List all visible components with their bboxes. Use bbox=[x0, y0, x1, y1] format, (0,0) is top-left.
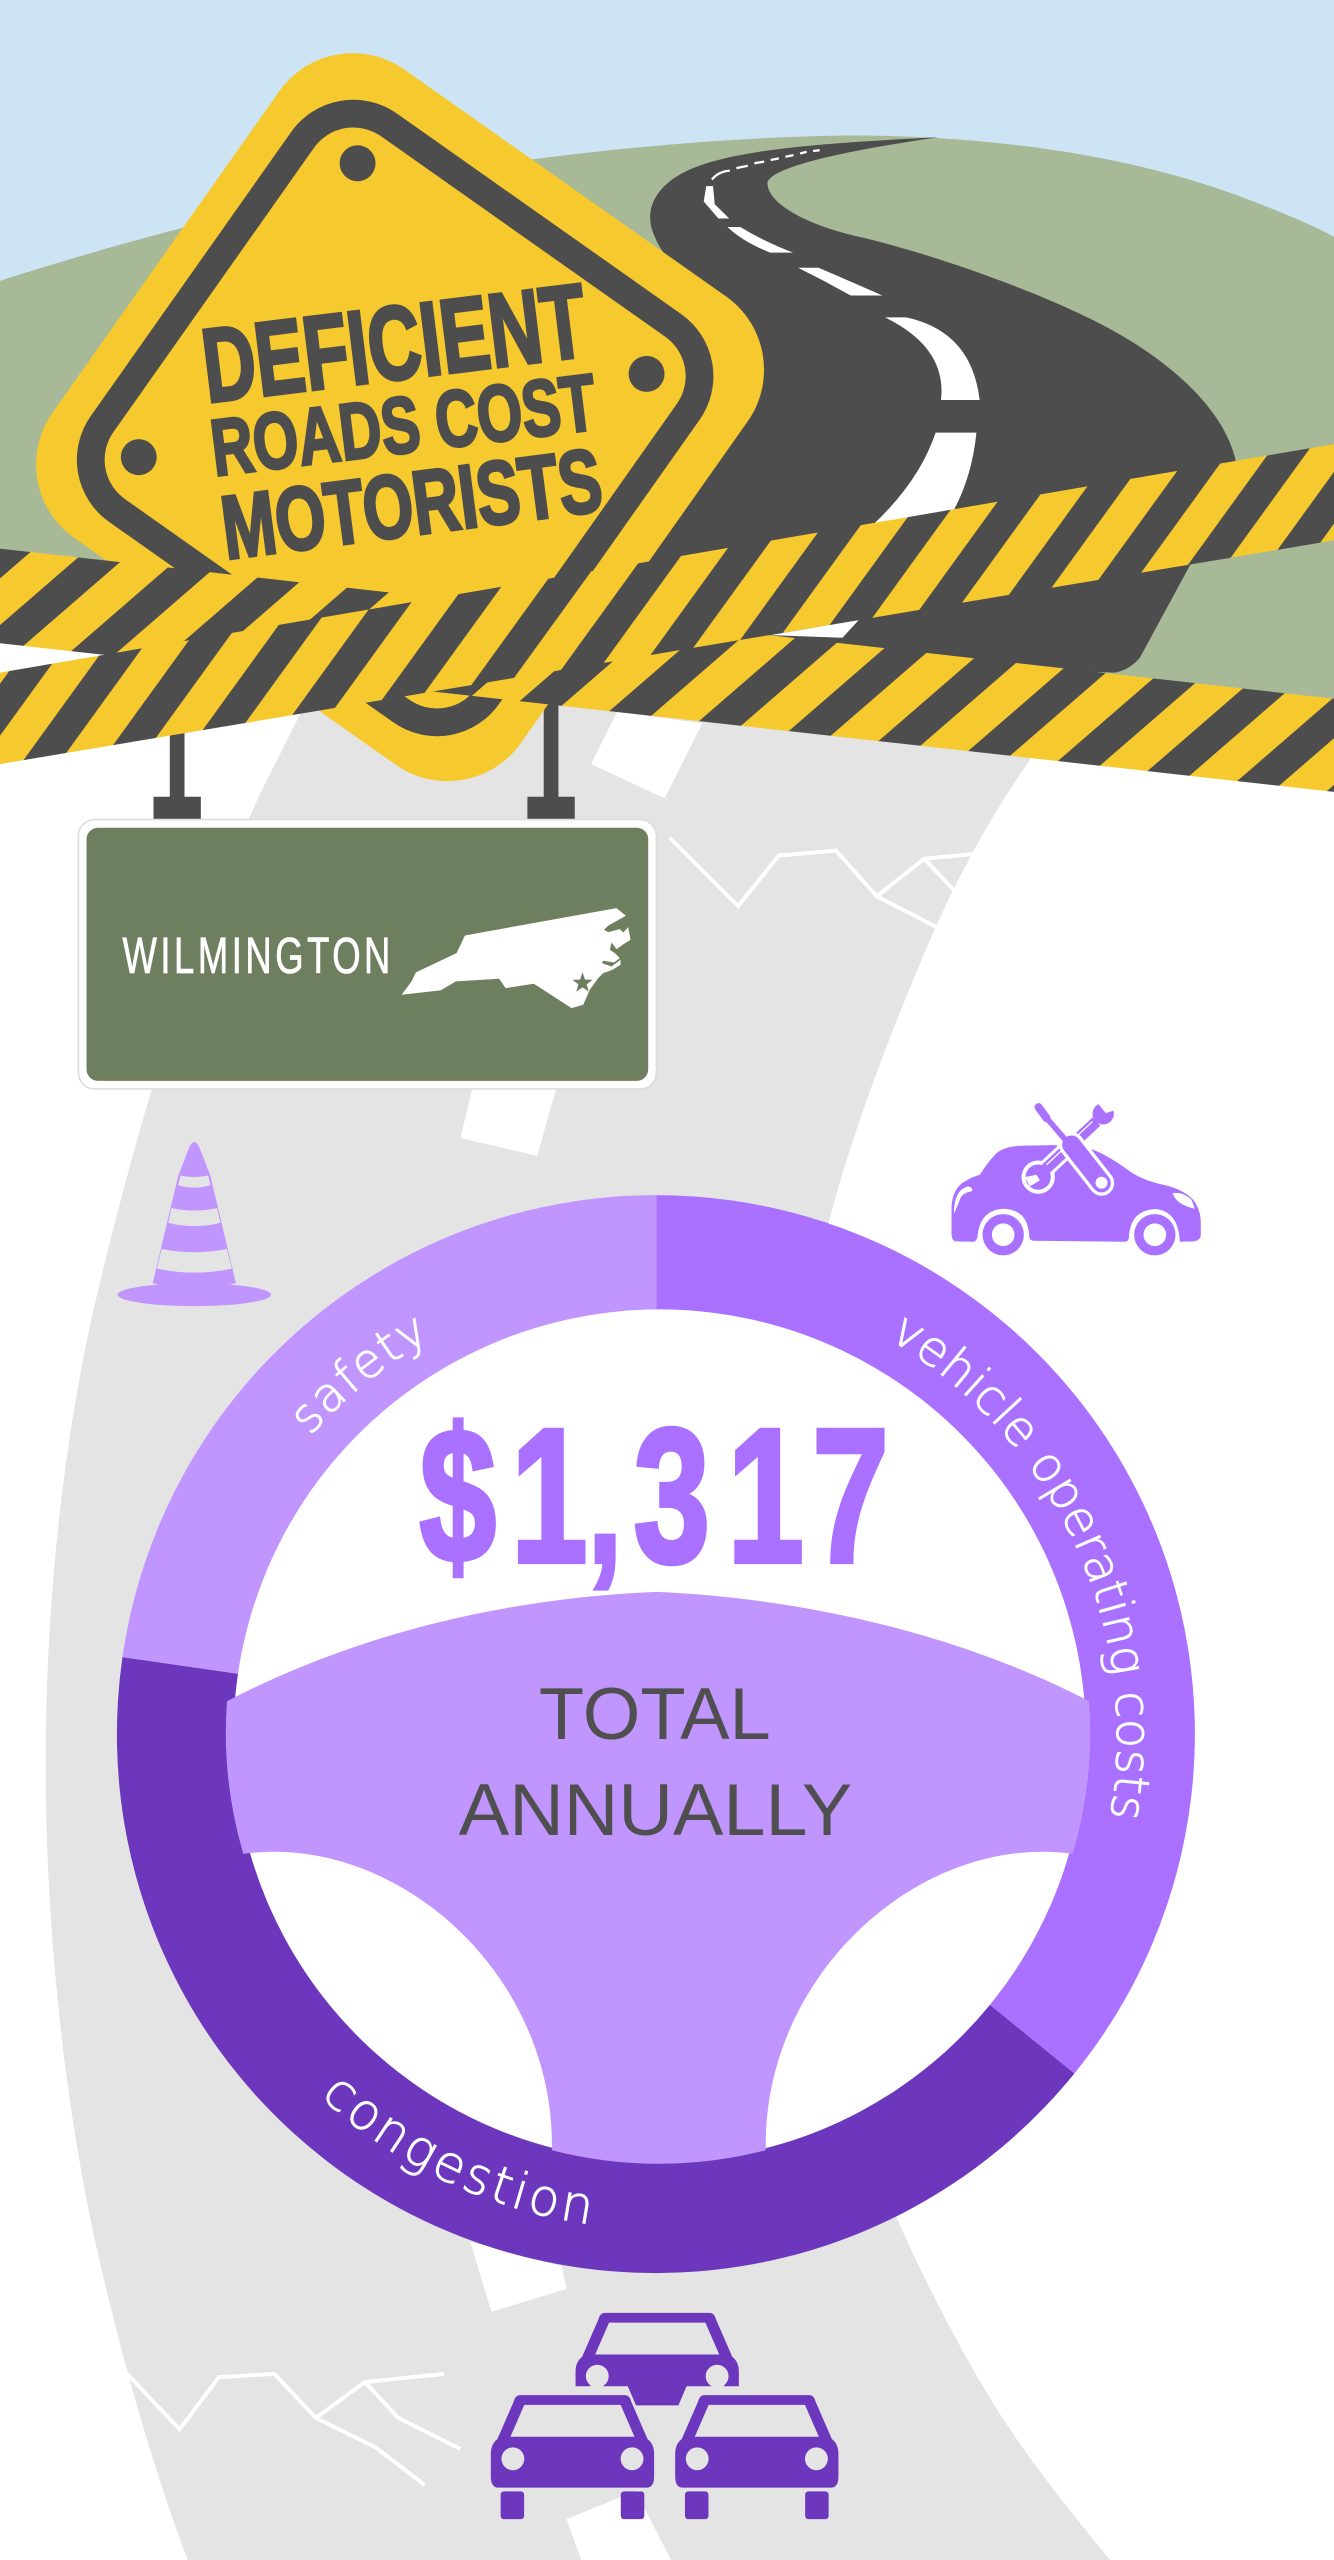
sign inner frame bbox=[66, 89, 724, 747]
segment: safety bbox=[122, 1195, 656, 1734]
car wheels bbox=[983, 1214, 1024, 1255]
sign heading: ROADS COST bbox=[206, 357, 601, 493]
sign face bbox=[1, 18, 799, 816]
asphalt road in the distance bbox=[588, 137, 1236, 673]
screwdriver bbox=[1039, 1107, 1108, 1189]
front left car bbox=[491, 2395, 654, 2519]
total amount: $1,317 bbox=[420, 1389, 889, 1603]
centre line dashes bbox=[704, 150, 980, 638]
grey road bbox=[46, 694, 1110, 2560]
icon: star bbox=[572, 972, 593, 992]
sky bbox=[0, 0, 1334, 490]
road crack lower bbox=[126, 2372, 460, 2485]
label: vehicle operating costs: vehicle operating costs bbox=[898, 1317, 1150, 1818]
wheel hub bbox=[226, 1592, 1090, 2164]
icon: traffic cone bbox=[118, 1142, 271, 1306]
road dash 2 bbox=[460, 1069, 562, 1156]
segment: congestion bbox=[117, 1657, 1074, 2273]
road dash 3 bbox=[470, 2242, 567, 2312]
front right car bbox=[675, 2395, 838, 2519]
label: congestion: congestion bbox=[326, 2082, 589, 2224]
label: total annually bbox=[459, 1672, 852, 1851]
car body bbox=[952, 1145, 1201, 1242]
sign bolts bbox=[121, 145, 665, 475]
hazard tape: upper band bbox=[0, 444, 1334, 764]
warning sign bbox=[1, 18, 799, 816]
label: safety: safety bbox=[296, 1318, 420, 1434]
icon: North Carolina map bbox=[402, 908, 631, 1008]
segment: vehicle operating costs bbox=[656, 1195, 1195, 2073]
sign posts bbox=[153, 694, 575, 820]
icon: three cars in traffic bbox=[491, 2313, 838, 2519]
car windows bbox=[954, 1186, 972, 1214]
label: total annually: TOTAL bbox=[539, 1672, 771, 1755]
sign heading: MOTORISTS bbox=[216, 431, 608, 579]
wrench bbox=[1022, 1101, 1114, 1194]
back car bbox=[576, 2313, 739, 2405]
wheel inner circle bbox=[233, 1309, 1086, 2162]
city name: WILMINGTON bbox=[122, 928, 394, 985]
sign heading bbox=[196, 262, 608, 579]
label: total annually: ANNUALLY bbox=[459, 1768, 852, 1851]
highway sign: Wilmington bbox=[78, 820, 656, 1089]
icon: car with crossed wrenches bbox=[952, 1101, 1201, 1255]
hazard tape: lower band bbox=[0, 549, 1334, 792]
sign heading: DEFICIENT bbox=[196, 262, 593, 425]
road dash 4 bbox=[567, 2490, 671, 2560]
green hill bbox=[0, 136, 1334, 705]
road dash 1 bbox=[591, 712, 702, 798]
steering wheel chart bbox=[116, 1195, 1195, 2274]
road crack upper bbox=[669, 838, 975, 927]
sign green panel bbox=[87, 828, 648, 1081]
